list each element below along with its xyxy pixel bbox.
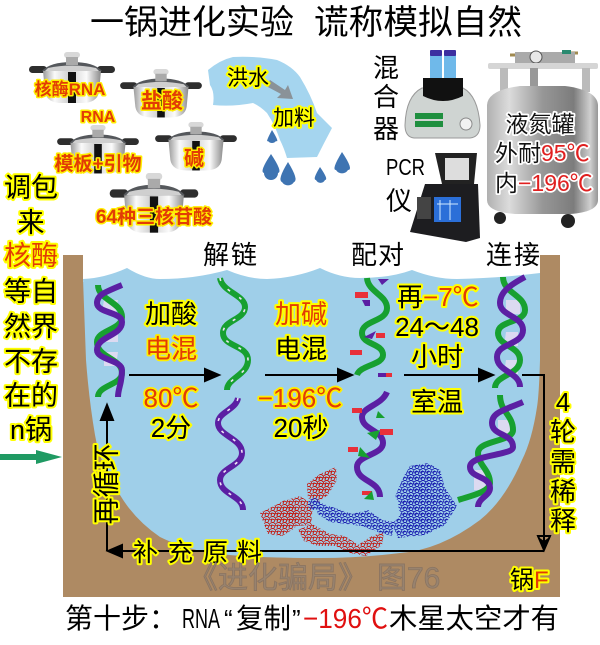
helix: lower product xyxy=(458,395,523,507)
step labels: 对 xyxy=(378,240,404,270)
text: left column: 然界 xyxy=(4,312,58,342)
protein: blue RNA structure xyxy=(308,463,457,538)
step labels: 解 xyxy=(203,240,229,270)
label: PCR仪 xyxy=(386,154,425,216)
arrow: into pot xyxy=(0,450,62,464)
pot: 核酶RNA xyxy=(29,52,115,103)
pot: 碱: 碱 xyxy=(184,147,204,170)
icon: PCR machine xyxy=(410,153,480,242)
text: left column xyxy=(4,173,58,445)
label: 再循环: 再循环 xyxy=(92,444,122,524)
text: step 2 conditions: −196℃ xyxy=(258,383,342,413)
title: 一锅进化实验 xyxy=(90,4,294,42)
label: 混合器: 合 xyxy=(373,82,399,112)
white air gap xyxy=(83,256,540,282)
watermark: 76 xyxy=(407,562,440,595)
arrow: flood direction xyxy=(266,80,293,99)
pot: 盐酸 xyxy=(120,69,202,117)
strand: annealing lower xyxy=(348,392,393,500)
strand: separated purple xyxy=(218,398,243,510)
step labels: 链 xyxy=(231,240,257,270)
pot: 模板+引物 xyxy=(54,125,142,175)
helix: upper product xyxy=(495,277,525,388)
strand: separated green xyxy=(220,278,248,390)
protein: red RNA structure xyxy=(260,467,384,556)
arrow: step 2 xyxy=(265,369,352,381)
helix: template strand xyxy=(97,285,122,397)
pot: 盐酸: 盐酸 xyxy=(141,90,183,113)
flood stream xyxy=(208,57,332,158)
text: step 3 conditions: 24～48 xyxy=(395,312,479,342)
label: 混合器 xyxy=(373,53,399,144)
text: step 3 conditions: 小时 xyxy=(411,342,463,372)
panel: ingredient pots xyxy=(29,52,237,233)
pot wall xyxy=(63,255,560,597)
caption: 木星太空才有 xyxy=(389,603,559,634)
pot: 64种三核苷酸: 64种三核苷酸 xyxy=(96,205,212,228)
text: step 2 conditions: 20秒 xyxy=(274,413,328,443)
icon: mixer xyxy=(405,50,480,138)
label: 洪水: 洪水 xyxy=(227,67,269,90)
caption: “ xyxy=(224,604,233,634)
text: step 2 conditions xyxy=(258,299,342,443)
label: tank text: 内−196℃ xyxy=(495,170,593,196)
text: left column: 不存 xyxy=(4,347,58,377)
flood diagram xyxy=(208,57,350,185)
text: step 1 conditions xyxy=(144,299,198,443)
label: tank text: 外耐95℃ xyxy=(495,140,590,166)
step labels: 连 xyxy=(486,240,512,270)
step labels xyxy=(203,240,540,270)
text: left column: n锅 xyxy=(10,415,52,445)
label: 加料: 加料 xyxy=(273,107,315,130)
label: 混合器: 混 xyxy=(373,53,399,83)
title xyxy=(90,4,522,42)
arrow: dilution loop down xyxy=(522,375,550,550)
label: RNA: RNA xyxy=(81,109,116,126)
pot: 核酶RNA: 核酶RNA xyxy=(35,79,105,99)
text: left column: 调包 xyxy=(4,173,58,203)
label: PCR仪: 仪 xyxy=(386,186,412,216)
text: left column: 在的 xyxy=(4,381,58,411)
text: step 1 conditions: 2分 xyxy=(151,413,191,443)
pot: 碱 xyxy=(155,122,237,170)
icon: water drops xyxy=(263,130,350,185)
text: step 1 conditions: 加酸 xyxy=(145,299,197,329)
caption: RNA xyxy=(182,603,220,634)
text: step 2 conditions: 电混 xyxy=(275,334,327,364)
step labels: 接 xyxy=(514,240,540,270)
label: 4轮需稀释: 需 xyxy=(550,447,576,477)
caption xyxy=(65,603,559,634)
text: step 1 conditions: 80℃ xyxy=(144,383,198,413)
label: 4轮需稀释: 稀 xyxy=(550,477,576,507)
label: 锅F: 锅F xyxy=(510,567,549,594)
label: 4轮需稀释: 轮 xyxy=(550,417,576,447)
label: 4轮需稀释: 4 xyxy=(556,387,570,417)
caption: ” xyxy=(292,604,301,634)
text: step 2 conditions: 加碱 xyxy=(275,299,327,329)
text: step 3 conditions xyxy=(395,282,479,417)
arrow: step 3 xyxy=(404,369,493,381)
step labels: 配 xyxy=(351,240,377,270)
caption: −196℃ xyxy=(303,603,388,634)
icon: liquid nitrogen tank xyxy=(487,50,598,228)
text: left column: 来 xyxy=(18,208,44,238)
water xyxy=(83,268,540,558)
text: step 3 conditions: 室温 xyxy=(411,387,463,417)
label: 混合器: 器 xyxy=(373,114,399,144)
title: 谎称模拟自然 xyxy=(314,4,522,42)
pot: 64种三核苷酸 xyxy=(96,173,212,233)
arrow: replenish left xyxy=(108,545,544,557)
caption: 复制 xyxy=(236,603,291,634)
panel: cooking pot vessel xyxy=(63,240,560,597)
strand: annealing upper xyxy=(350,278,392,375)
label: tank text: 液氮罐 xyxy=(506,111,574,137)
arrowhead: dilution loop xyxy=(537,536,551,551)
watermark: 《进化骗局》 xyxy=(188,562,368,595)
label: PCR仪: PCR xyxy=(386,154,425,180)
text: step 3 conditions: 再−7℃ xyxy=(397,282,479,312)
text: left column: 核酶 xyxy=(4,241,58,271)
label: tank text xyxy=(495,111,593,196)
pot: 模板+引物: 模板+引物 xyxy=(54,153,142,175)
arrow: recycle up xyxy=(101,405,113,551)
watermark: 图 xyxy=(377,562,407,595)
caption: 第十步： xyxy=(65,603,177,634)
label: 4轮需稀释: 释 xyxy=(550,506,576,536)
label: 4轮需稀释 xyxy=(550,387,576,536)
arrow: step 1 xyxy=(129,369,219,381)
text: left column: 等自 xyxy=(4,277,58,307)
text: step 1 conditions: 电混 xyxy=(145,334,197,364)
label: 补充原料: 补充原料 xyxy=(133,539,262,567)
